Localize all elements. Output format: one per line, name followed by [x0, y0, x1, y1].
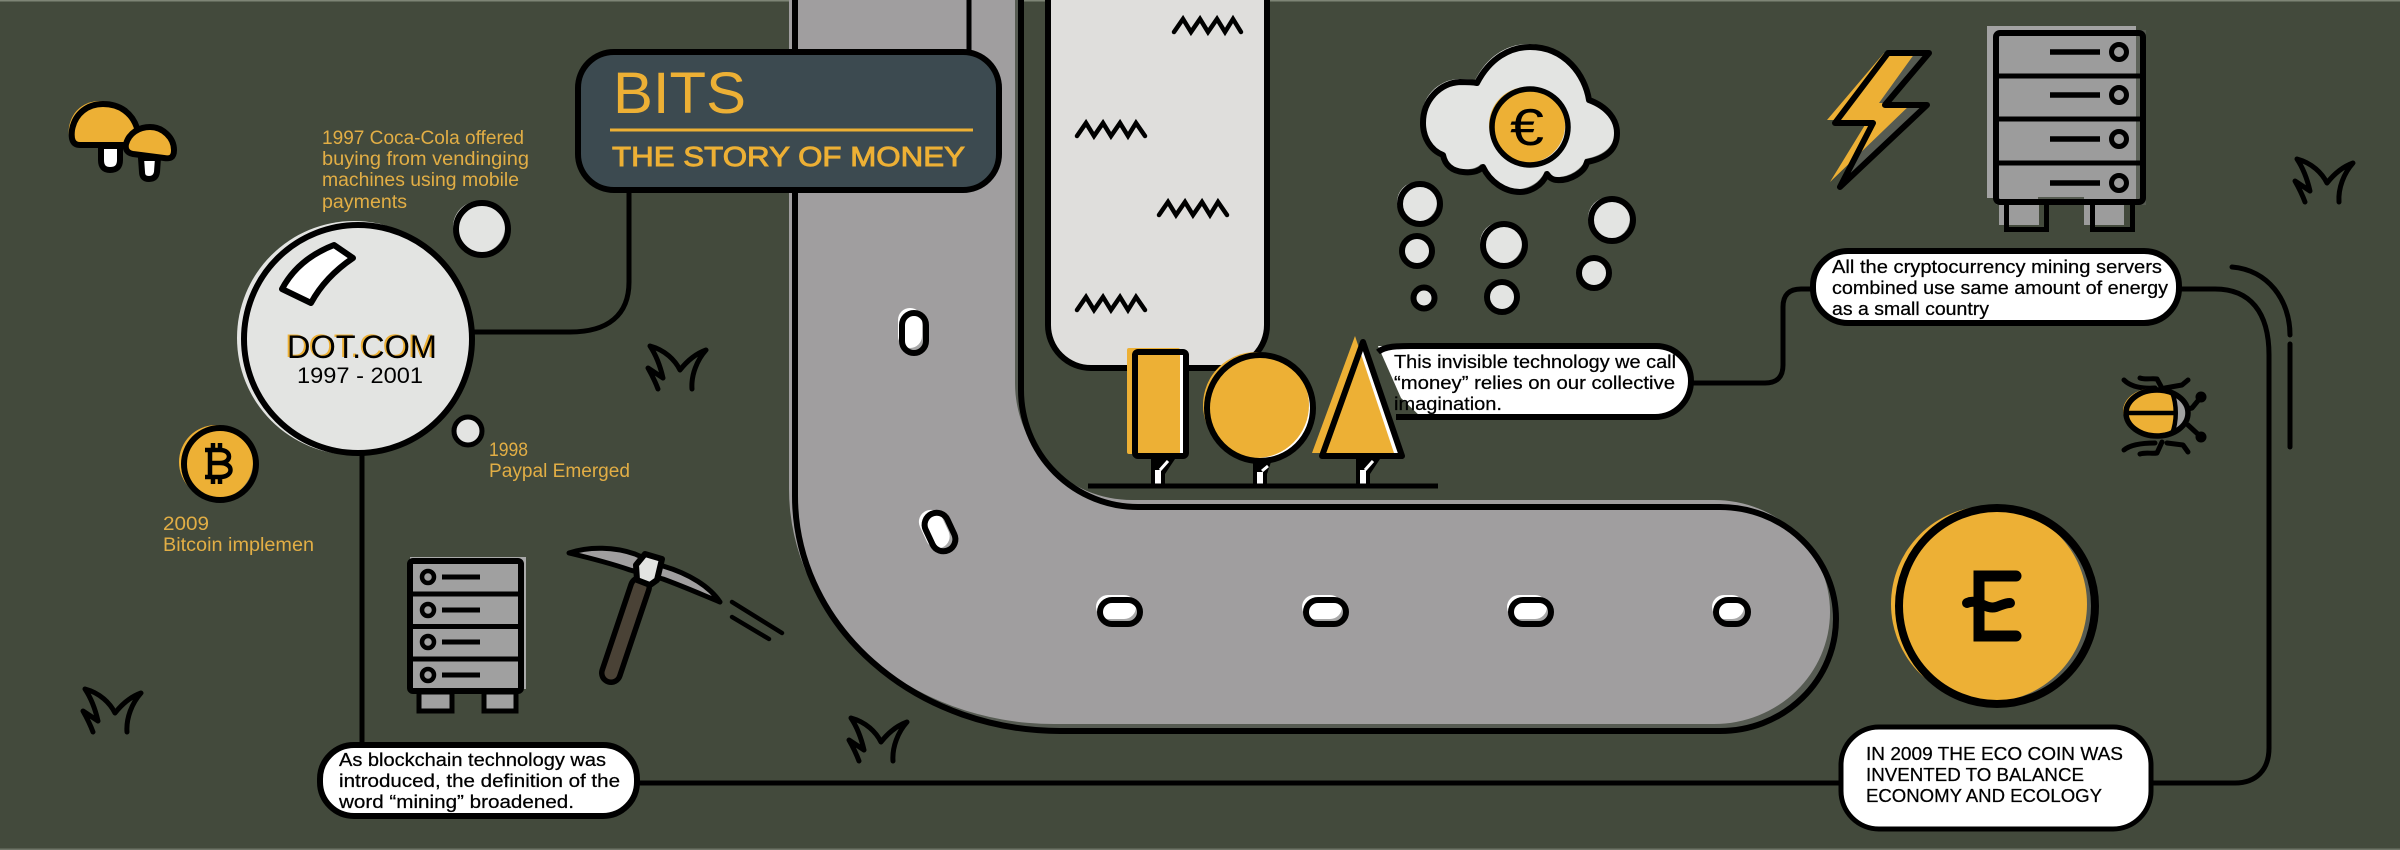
- icon: pickaxe: [569, 548, 782, 673]
- small bubble 1997: [453, 201, 508, 255]
- callout: blockchain: [320, 745, 637, 816]
- text: 2009 Bitcoin: [163, 514, 314, 556]
- icon: small server: [410, 557, 526, 711]
- shape tree: rectangle: [1127, 348, 1186, 486]
- ground line: [1088, 484, 1438, 488]
- text: 1997 Coca-Cola: 1997 Coca-Cola offered: [322, 128, 524, 149]
- icon: grass near road: [849, 718, 907, 761]
- text: 1997 Coca-Cola: payments: [322, 192, 407, 213]
- icon: beetle: [2123, 378, 2206, 454]
- decorative arc: [2232, 267, 2290, 447]
- title: BITS: BITS: [613, 61, 746, 126]
- road holes: [898, 308, 1748, 624]
- icon: lightning: [1827, 53, 1929, 187]
- icon: big server: [1987, 26, 2146, 230]
- text: 1998 PayPal: [489, 440, 630, 482]
- shape tree: circle: [1203, 352, 1313, 486]
- callout: mining servers: combined use same amount of energy: [1832, 277, 2169, 298]
- text: 1997 Coca-Cola: [322, 128, 529, 213]
- callout: mining servers: [1813, 251, 2179, 323]
- callout: invisible technology: This invisible technology we call: [1394, 351, 1676, 372]
- callout: eco coin: [1841, 727, 2151, 829]
- text: 1998 PayPal: 1998: [489, 440, 528, 461]
- icon: bitcoin coin: [179, 425, 256, 500]
- highlight: [282, 245, 353, 303]
- text: 1997 Coca-Cola: machines using mobile: [322, 170, 519, 191]
- callout: eco coin: ECONOMY AND ECOLOGY: [1866, 785, 2102, 806]
- shape tree: triangle: [1312, 336, 1402, 486]
- dot.com bubble: [237, 221, 472, 455]
- callout: invisible technology: imagination.: [1394, 393, 1502, 414]
- small bubble 1998: [452, 416, 482, 445]
- river: [1048, 0, 1267, 368]
- callout: blockchain: word “mining” broadened.: [338, 791, 574, 812]
- thought bubbles: [1397, 182, 1633, 312]
- text: 2009 Bitcoin: 2009: [163, 514, 209, 535]
- icon: cloud with euro: [1421, 44, 1617, 192]
- icon: grass top right: [2295, 159, 2353, 202]
- callout: blockchain: As blockchain technology was: [339, 749, 606, 770]
- text: 2009 Bitcoin: Bitcoin implemen: [163, 535, 314, 556]
- connector lines: [362, 190, 2269, 783]
- icon: grass top left: [648, 346, 706, 389]
- euro coin: €: [1510, 99, 1544, 157]
- callout: mining servers: as a small country: [1832, 298, 1990, 319]
- text: 1998 PayPal: Paypal Emerged: [489, 461, 630, 482]
- callout: eco coin: IN 2009 THE ECO COIN WAS: [1866, 743, 2123, 764]
- callout: eco coin: INVENTED TO BALANCE: [1866, 764, 2084, 785]
- callout: mining servers: All the cryptocurrency mining servers: [1832, 256, 2162, 277]
- euro coin: [1489, 87, 1568, 165]
- dates: 1997 - 2001: [297, 363, 423, 388]
- callout: blockchain: introduced, the definition of the: [339, 770, 620, 791]
- icon: mushrooms: [69, 101, 174, 179]
- icon: eco coin: [1891, 506, 2095, 704]
- title panel: [578, 52, 999, 190]
- callout: invisible technology: [1312, 336, 1691, 486]
- road: [789, 0, 1836, 731]
- callout: invisible technology: “money” relies on our collective: [1394, 372, 1675, 393]
- river ripples: [1077, 19, 1241, 310]
- icon: grass bottom left: [83, 689, 141, 732]
- dot.com label: DOT.COM: [287, 329, 437, 365]
- subtitle: THE STORY OF MONEY: [612, 141, 965, 172]
- text: 1997 Coca-Cola: buying from vendinging: [322, 149, 529, 170]
